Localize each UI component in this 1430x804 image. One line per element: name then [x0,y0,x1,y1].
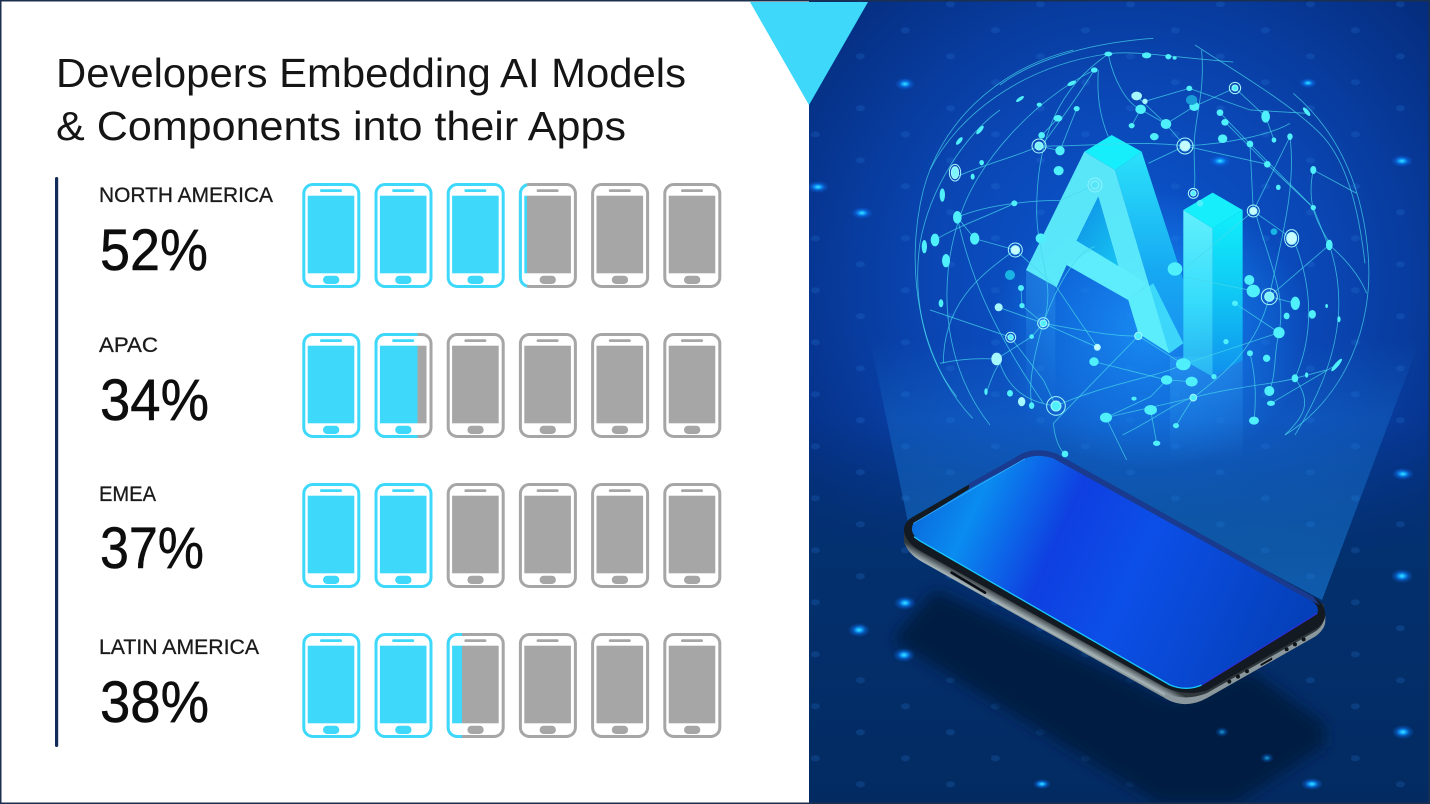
row: North America [99,184,720,286]
value: 38%: 38% [100,670,209,735]
panel: white content background [0,0,810,804]
value: 37%: 37% [100,516,204,581]
globe network lines [915,38,1369,460]
phone icons: 1.8 of 6 filled [304,334,720,436]
ringed hub nodes [949,82,1299,415]
title: Developers Embedding AI Models [56,50,686,96]
phone icons: 3.1 of 6 filled [304,184,720,286]
panel: AI illustration [807,0,1430,804]
globe network nodes [922,52,1343,457]
value: 52%: 52% [100,218,208,283]
glowing floor dots [807,78,1414,790]
label: APAC: APAC [99,334,158,357]
title [56,50,686,149]
smartphone [904,450,1325,704]
value: 34%: 34% [100,368,209,433]
phone icons: 2 of 6 filled [304,484,720,586]
AI hologram globe [915,38,1369,470]
row: Latin America [99,634,720,736]
phone icons: 2.3 of 6 filled [304,634,720,736]
title: & Components into their Apps [56,103,626,149]
row: APAC [99,334,720,436]
label: Latin America: LATIN AMERICA [99,636,259,659]
phone shadow [893,590,1325,804]
AI letters [1026,135,1243,463]
light beam [877,370,1408,600]
cyan triangle accent [750,2,868,105]
label: EMEA: EMEA [99,483,156,506]
label: North America: NORTH AMERICA [99,184,273,207]
row: EMEA [99,483,720,586]
vertical divider line [55,177,58,747]
